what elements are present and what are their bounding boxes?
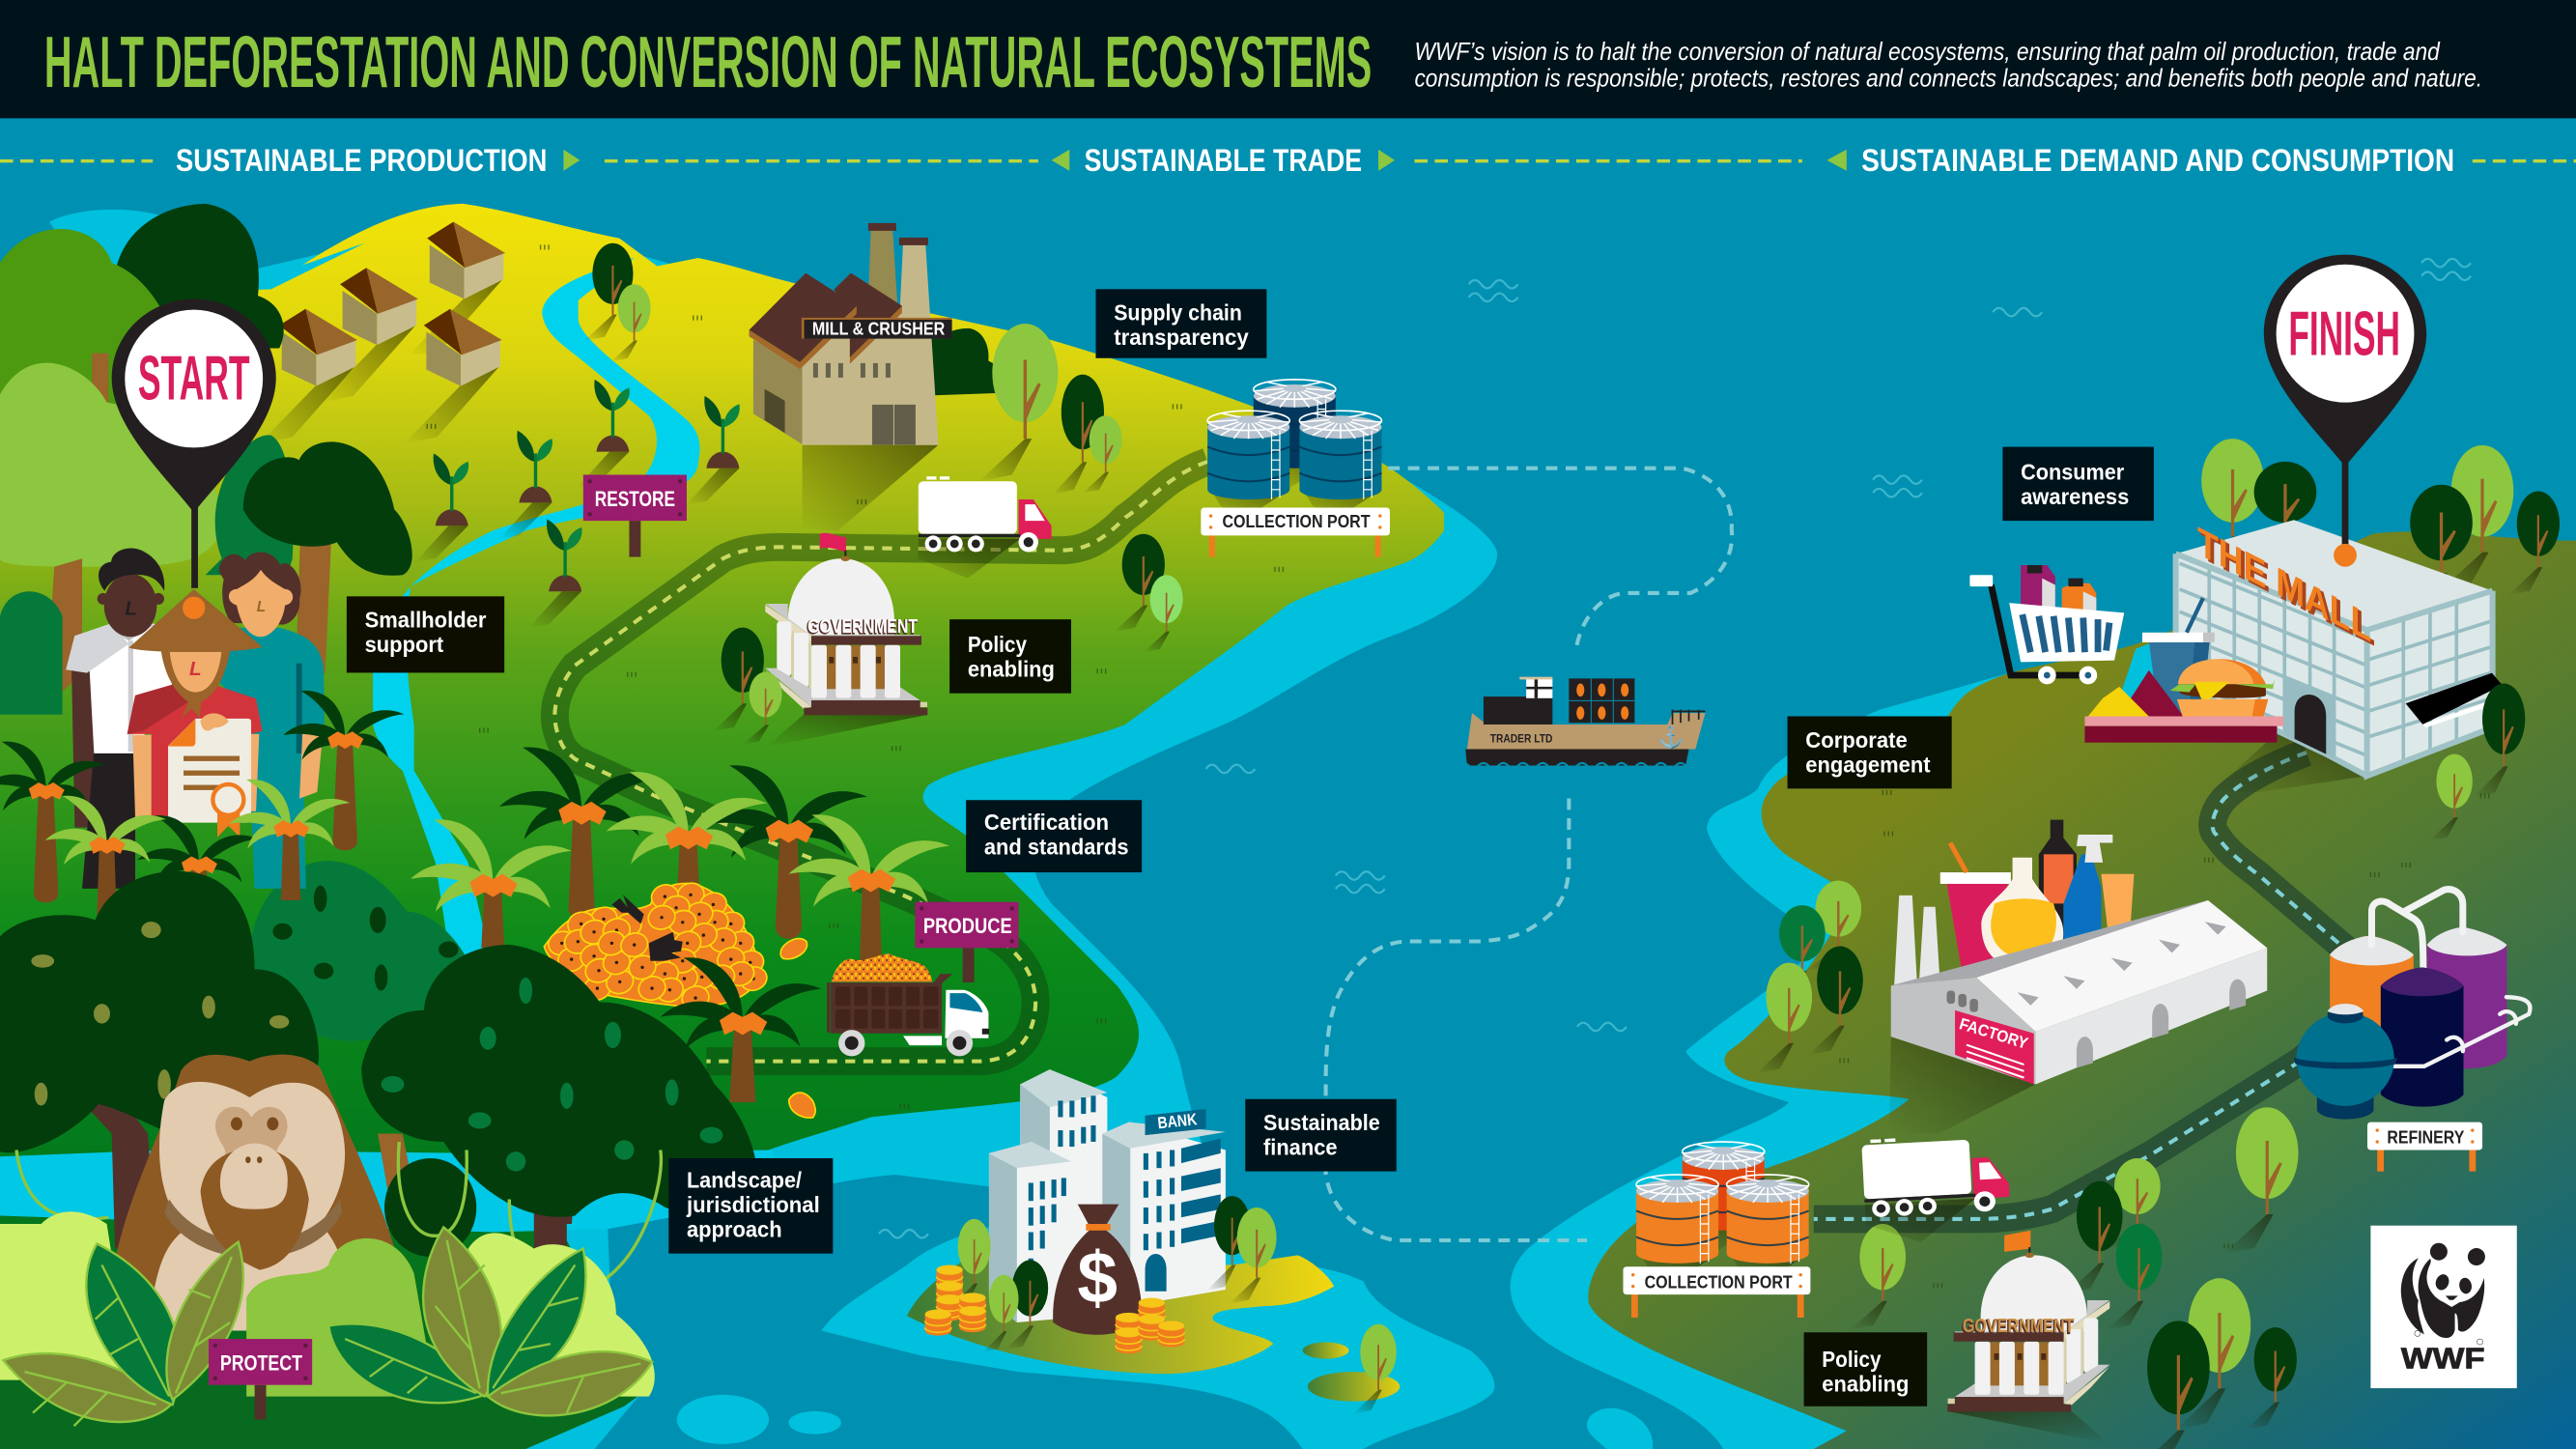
land: production coast [0, 204, 1444, 1449]
flask [1981, 858, 2063, 969]
cyan shoreline: right coast [1511, 649, 2300, 1449]
upper pipes [2371, 890, 2463, 972]
cargo ship [1458, 677, 1706, 768]
the mall [2176, 520, 2503, 792]
nachos [2119, 670, 2183, 716]
label: policy enabling, production: Policy [968, 632, 1027, 657]
stem: start pin [191, 493, 198, 588]
farmer: man in conical hat: L [189, 658, 202, 680]
teal vessel [2317, 1094, 2373, 1120]
header band [0, 0, 2576, 118]
label: sustainable finance: finance [1263, 1135, 1338, 1160]
label: corporate engagement: Corporate [1805, 727, 1908, 753]
river: production coast [373, 258, 700, 969]
WWF logo: WWF [2401, 1343, 2485, 1376]
label: landscape / jurisdictional approach: approach [687, 1217, 782, 1242]
lorry: tanker, production coast [919, 476, 1052, 579]
panda [2401, 1243, 2485, 1338]
factory walls and roof [1891, 900, 2208, 985]
start pin: START [138, 343, 250, 412]
section dashes [0, 160, 2576, 162]
section header: sustainable demand and consumption: SUSTAINABLE DEMAND AND CONSUMPTION [1861, 143, 2454, 178]
mall foreground trees [2429, 683, 2525, 840]
grass ticks [427, 244, 2489, 1288]
land: consumption coast [1588, 531, 2576, 1449]
navy cylinder [2381, 967, 2464, 1107]
sign: collection port, production: COLLECTION PORT [1222, 511, 1371, 531]
cyan band behind top-left trees [49, 210, 365, 296]
mall lettering: THE MALL [2200, 523, 2375, 655]
top-left trees [0, 204, 412, 715]
bush behind mill [931, 328, 1006, 395]
small islets [1303, 1324, 1400, 1414]
factory arches [1947, 980, 2246, 1067]
label: policy enabling, consumption: Policy [1822, 1347, 1882, 1372]
section header: sustainable production: SUSTAINABLE PRODUCTION [176, 143, 547, 178]
sign: collection port, consumption [1623, 1266, 1810, 1318]
mall lettering: THE MALL [2197, 519, 2371, 651]
burger [2170, 659, 2275, 718]
sign: smallholder support: support [365, 632, 444, 657]
palms: mid group [410, 748, 949, 976]
cargo ship: ⚓ [1657, 724, 1684, 749]
palm fruit pile [544, 880, 770, 1013]
sign: restore: RESTORE [595, 487, 675, 511]
mall shadow [2212, 727, 2367, 792]
chimneys [867, 230, 898, 316]
sign: collection port, production [1201, 508, 1390, 557]
label: consumer awareness [2002, 447, 2154, 521]
factory skylights [2018, 922, 2226, 1006]
flag: government, consumption [2004, 1231, 2030, 1252]
label: corporate engagement: engagement [1805, 752, 1931, 777]
label: corporate engagement [1788, 716, 1952, 788]
factory [1889, 900, 2267, 1133]
label: sustainable finance: Sustainable [1263, 1110, 1380, 1135]
refinery [2294, 890, 2530, 1120]
consumer products [1894, 820, 2134, 985]
label: policy enabling, production [949, 619, 1071, 694]
mill shadow [803, 445, 939, 531]
coin stacks [925, 1265, 1184, 1353]
loose palm fruit [780, 939, 815, 1118]
government label, consumption: GOVERNMENT [1963, 1316, 2075, 1337]
sign: refinery: REFINERY [2387, 1127, 2465, 1148]
mill sign [802, 318, 952, 339]
label: policy enabling, production: enabling [968, 657, 1055, 682]
sign: protect [209, 1339, 312, 1419]
farmer: woman in teal blouse: L [257, 599, 266, 615]
background trunks [46, 558, 82, 706]
jungle tree: dark left [0, 871, 319, 1249]
lower pipes [2393, 997, 2530, 1066]
mill roof [834, 273, 902, 364]
mill windows and doors [813, 363, 916, 445]
mall walls [2176, 554, 2367, 776]
trees by factory [1757, 881, 1863, 1073]
road centre line [1814, 753, 2389, 1219]
sign: smallholder support [347, 596, 504, 672]
sign: restore [583, 474, 687, 557]
government building [765, 551, 927, 747]
sign: refinery [2367, 1122, 2482, 1172]
saplings [415, 380, 740, 628]
sign: smallholder support: Smallholder [365, 608, 487, 633]
foreground ground [0, 1380, 649, 1449]
orange cylinder [2330, 936, 2414, 1037]
finish pin: FINISH [2288, 298, 2400, 368]
label: policy enabling, consumption: enabling [1822, 1371, 1909, 1396]
factory sign [1955, 1010, 2034, 1084]
drink cup [1947, 884, 2007, 969]
bank buildings [989, 1069, 1226, 1322]
flag: government [820, 533, 846, 552]
palms: left group [0, 691, 404, 917]
mall awning [2406, 673, 2503, 724]
houses [260, 222, 505, 443]
government label: GOVERNMENT [807, 617, 918, 639]
spray bottle [2063, 854, 2101, 945]
fast food tray [2084, 598, 2283, 743]
shopping trolley [1969, 565, 2124, 684]
label: supply chain transparency: transparency [1114, 325, 1249, 350]
trees on bank island [951, 1196, 1277, 1352]
label: certification and standards [966, 800, 1142, 872]
tower: front left [989, 1142, 1071, 1322]
jungle tree: teal [249, 861, 485, 1044]
farmer: man in conical hat [127, 589, 263, 818]
farmer: man in white shirt: L [125, 598, 137, 620]
trees behind the mall [2189, 439, 2560, 606]
label: supply chain transparency: Supply chain [1114, 300, 1242, 326]
cargo ship: TRADER LTD [1490, 732, 1553, 746]
shipping route: dashed line, ship to port [1326, 799, 1587, 1240]
tray [2084, 716, 2283, 726]
understory shrub and trunk [378, 1133, 476, 1257]
farmer: man in white shirt [66, 548, 172, 889]
chimneys [1894, 895, 1917, 985]
mall window grid [2180, 563, 2493, 763]
cyan pool by the mall [2119, 616, 2218, 706]
road centre line [554, 462, 1207, 1062]
farmers with certificate [66, 548, 325, 889]
tube [2101, 874, 2134, 945]
panda marks [2415, 1330, 2483, 1345]
cyan shoreline: bank island halo [821, 1209, 1494, 1449]
factory shadow [1889, 1037, 2035, 1133]
label: sustainable finance [1245, 1099, 1397, 1172]
sign: produce: PRODUCE [923, 914, 1012, 938]
vines [16, 1142, 661, 1291]
mill and crusher [750, 223, 1006, 531]
water ripples [879, 259, 2471, 1237]
label: supply chain transparency [1095, 289, 1266, 358]
foreground leaves [3, 1227, 652, 1426]
palm: foreground [661, 957, 821, 1102]
vision statement: WWF’s vision is to halt the conversion of natural ecosystems, ensuring that palm oil production, trade and [1414, 39, 2441, 66]
tower: right with bank sign: BANK [1157, 1110, 1199, 1132]
government label, consumption: GOVERNMENT [1962, 1317, 2074, 1338]
factory: FACTORY [1957, 1014, 2030, 1053]
government building, consumption [1947, 1247, 2109, 1443]
vision statement [1414, 39, 2482, 92]
start pin [112, 299, 276, 513]
finish pin stem and ball [2334, 460, 2357, 567]
road: production [554, 462, 1207, 1062]
trees: production coast [584, 243, 1183, 731]
lorry: tanker, consumption coast [1861, 1132, 2012, 1245]
collection port tanks, orange [1636, 1142, 1809, 1283]
bank island [907, 1255, 1334, 1374]
tree by government [743, 672, 782, 745]
road: consumption [1814, 753, 2389, 1219]
money bag: $ [1077, 1237, 1118, 1319]
sign: collection port, consumption: COLLECTION PORT [1645, 1271, 1793, 1292]
sign: protect: PROTECT [220, 1350, 302, 1375]
mill and crusher: MILL & CRUSHER [812, 319, 946, 339]
collection port tanks, blue [1207, 380, 1381, 519]
farmer: woman in teal blouse [219, 553, 325, 889]
tower: right with bank sign [1102, 1109, 1226, 1309]
foreground bushes [0, 1211, 655, 1397]
label: certification and standards: and standards [984, 834, 1129, 859]
orangutan [107, 1055, 410, 1331]
purple cylinder [2427, 927, 2507, 1069]
government label: GOVERNMENT [807, 616, 919, 638]
cyan shoreline: left coast [0, 213, 1497, 1449]
label: certification and standards: Certification [984, 810, 1109, 835]
palm fruit lorry [827, 953, 989, 1056]
soda cup [2149, 640, 2210, 716]
label: landscape / jurisdictional approach: jurisdictional [686, 1192, 820, 1217]
jungle tree: dark centre [361, 945, 758, 1348]
dark bottle [2039, 820, 2077, 945]
tree beside mill [979, 324, 1058, 481]
mill walls [803, 309, 939, 445]
tower: back [1020, 1069, 1107, 1265]
money bag [1053, 1205, 1142, 1335]
label: landscape / jurisdictional approach [668, 1158, 833, 1254]
label: policy enabling, consumption [1804, 1332, 1927, 1406]
shipping route: dashed line, port to ship [1388, 469, 1732, 652]
cyan pools [677, 1395, 1653, 1449]
river crossing the jungle [0, 1150, 788, 1233]
label: landscape / jurisdictional approach: Landscape/ [687, 1168, 803, 1193]
section header: sustainable trade: SUSTAINABLE TRADE [1085, 143, 1362, 178]
title: HALT DEFORESTATION AND CONVERSION OF NATURAL ECOSYSTEMS [44, 21, 1372, 102]
WWF logo [2370, 1226, 2517, 1388]
label: consumer awareness: awareness [2021, 484, 2129, 509]
sign: produce [915, 902, 1019, 982]
finish pin [2264, 255, 2426, 467]
mall door [2284, 678, 2335, 758]
label: consumer awareness: Consumer [2021, 460, 2124, 485]
trees: lower consumption coast [1851, 1107, 2299, 1449]
certificate [168, 713, 251, 838]
